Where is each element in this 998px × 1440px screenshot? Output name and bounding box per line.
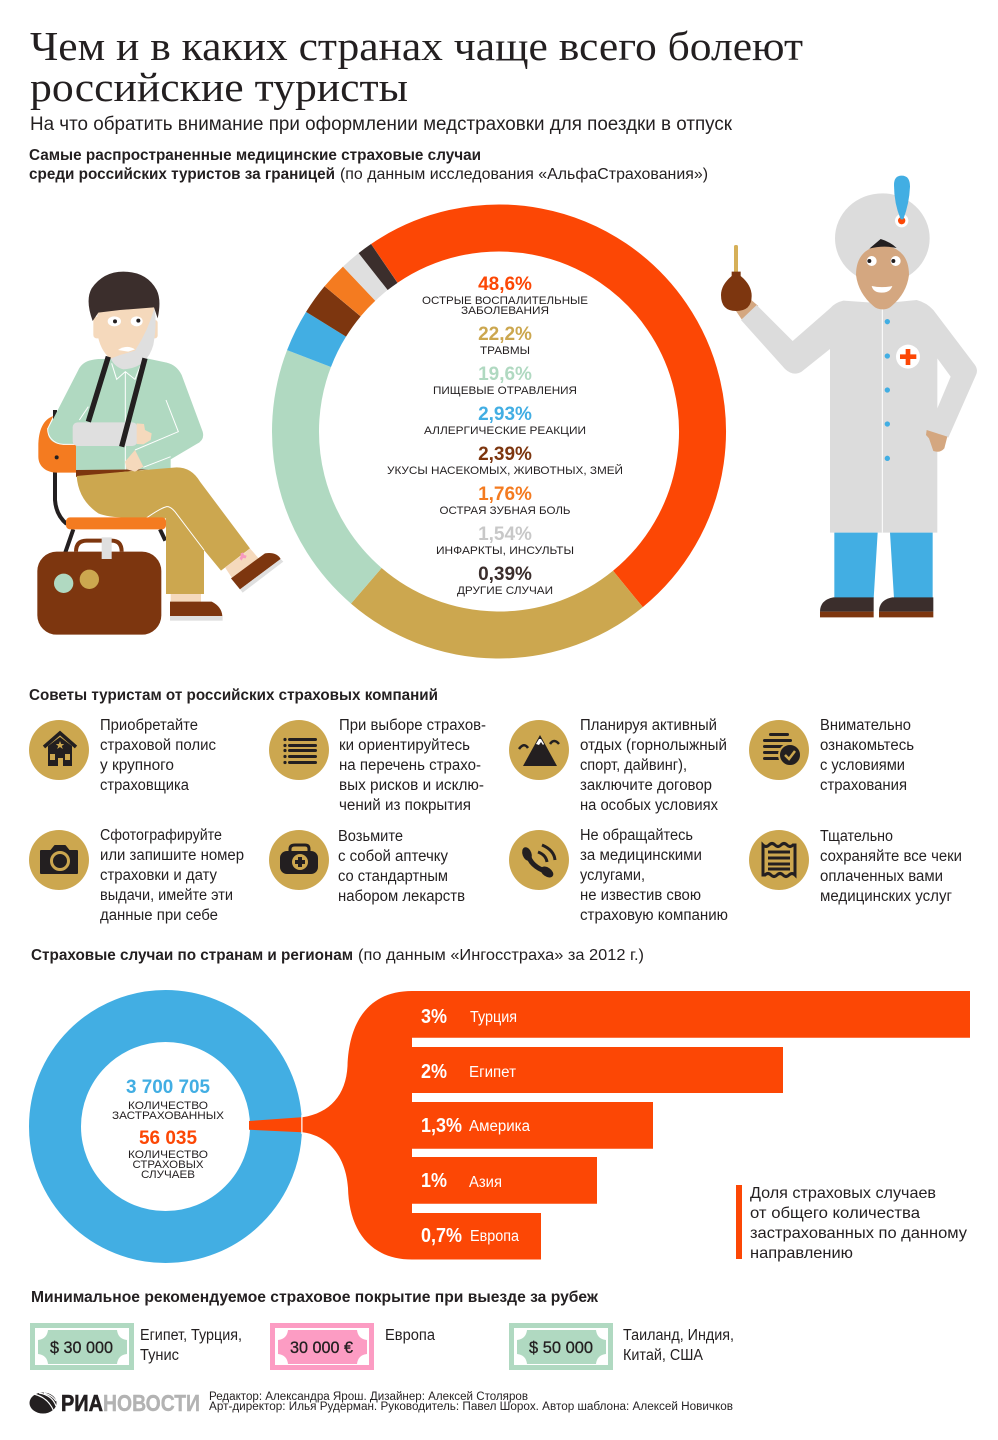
donut centre figures: КОЛИЧЕСТВО (128, 1149, 208, 1161)
donut centre figures (112, 1077, 225, 1181)
credits: Редактор: Александра Ярош. Дизайнер: Алексей Столяров (209, 1391, 528, 1403)
heading: cases by region: (по данным «Ингосстраха» за 2012 г.) (358, 947, 644, 964)
heading: common insurance cases: (по данным исследования «АльфаСтрахования») (340, 166, 708, 183)
donut centre figures: КОЛИЧЕСТВО (128, 1100, 208, 1112)
tip: read risk list: чений из покрытия (339, 797, 471, 814)
banknote: 50000 dollars: $ 50 000 (529, 1339, 593, 1357)
donut legend values: ПИЩЕВЫЕ ОТРАВЛЕНИЯ (433, 385, 577, 397)
logo: RIA Novosti (30, 1390, 200, 1416)
tip: read risk list: ки ориентируйтесь (339, 737, 470, 754)
donut centre figures: 56 035 (139, 1128, 197, 1149)
donut legend values: УКУСЫ НАСЕКОМЫХ, ЖИВОТНЫХ, ЗМЕЙ (387, 464, 623, 477)
tip: buy policy: Приобретайте (100, 717, 198, 734)
donut centre figures: 3 700 705 (126, 1077, 210, 1098)
logo: RIA Novosti: НОВОСТИ (103, 1390, 200, 1416)
legend note: Доля страховых случаев (750, 1185, 936, 1202)
donut legend values: 0,39% (478, 564, 532, 585)
tip: active holiday: Планируя активный (580, 717, 717, 734)
donut legend values: 48,6% (478, 274, 532, 295)
banknote: 50000 dollars: Китай, США (623, 1347, 704, 1364)
donut legend values: 19,6% (478, 364, 532, 385)
bar labels: Америка (469, 1118, 530, 1135)
tip: call insurer: за медицинскими (580, 847, 702, 864)
legend note: направлению (750, 1245, 853, 1262)
bar labels: 1% (421, 1170, 447, 1192)
tip: read conditions: с условиями (820, 757, 905, 774)
legend note (736, 1185, 967, 1262)
tip: first aid kit: набором лекарств (338, 888, 465, 905)
heading: tips: Советы туристам от российских страховых компаний (29, 687, 438, 704)
tip: active holiday (509, 717, 727, 814)
legend note: застрахованных по данному (750, 1225, 967, 1242)
bar labels: Турция (470, 1009, 517, 1026)
bar labels (421, 1006, 530, 1247)
tip: buy policy: страховщика (100, 777, 189, 794)
bar labels: 2% (421, 1061, 447, 1083)
tip: keep receipts (749, 828, 962, 905)
tip: buy policy: у крупного (100, 757, 174, 774)
donut legend values: 2,39% (478, 444, 532, 465)
heading: cases by region: Страховые случаи по странам и регионам (31, 947, 353, 964)
heading: common insurance cases: среди российских туристов за границей (29, 166, 335, 183)
banknote: 30000 euro: 30 000 € (290, 1339, 353, 1357)
tip: keep receipts: сохраняйте все чеки (820, 848, 962, 865)
tip: keep receipts: оплаченных вами (820, 868, 943, 885)
legend note: от общего количества (750, 1205, 920, 1222)
tip: call insurer: страховую компанию (580, 907, 728, 924)
tip: call insurer: Не обращайтесь (580, 827, 693, 844)
tip: read risk list: на перечень страхо- (339, 757, 481, 774)
tip: photograph policy: данные при себе (100, 907, 218, 924)
donut legend values: ЗАБОЛЕВАНИЯ (461, 305, 549, 317)
donut: insured total (55, 1016, 302, 1237)
tip: first aid kit: Возьмите (338, 828, 403, 845)
logo: RIA Novosti: РИА (61, 1390, 103, 1416)
donut chart: insurance cases (211, 144, 787, 719)
banknote: 50000 dollars: Таиланд, Индия, (623, 1327, 734, 1344)
donut legend values: ТРАВМЫ (480, 345, 530, 357)
credits (209, 1391, 733, 1413)
tip: read conditions (749, 717, 914, 794)
bar labels: Азия (469, 1174, 502, 1191)
heading: minimum coverage: Минимальное рекомендуемое страховое покрытие при выезде за рубеж (31, 1289, 599, 1306)
donut legend values: ДРУГИЕ СЛУЧАИ (457, 585, 553, 597)
bar labels: 0,7% (421, 1225, 462, 1247)
tip: call insurer: не известив свою (580, 887, 701, 904)
bar labels: Египет (469, 1064, 516, 1081)
bar labels: 1,3% (421, 1115, 462, 1137)
credits: Арт-директор: Илья Рудерман. Руководитель: Павел Шорох. Автор шаблона: Алексей Новичков (209, 1401, 733, 1413)
donut legend values: 1,54% (478, 524, 532, 545)
tip: first aid kit: с собой аптечку (338, 848, 448, 865)
banknote: 30000 dollars (32, 1326, 242, 1368)
tip: call insurer (509, 827, 728, 924)
banknote: 30000 dollars: $ 30 000 (50, 1339, 113, 1357)
tip: read conditions: страхования (820, 777, 907, 794)
banknote: 30000 dollars: Тунис (140, 1347, 179, 1364)
donut legend values (387, 274, 623, 597)
title (30, 23, 803, 110)
heading: common insurance cases: Самые распространенные медицинские страховые случаи (29, 147, 481, 164)
tip: active holiday: отдых (горнолыжный (580, 737, 727, 754)
donut centre figures: СЛУЧАЕВ (141, 1169, 195, 1181)
tip: read risk list: вых рисков и исклю- (339, 777, 484, 794)
tip: photograph policy: выдачи, имейте эти (100, 887, 233, 904)
donut legend values: ОСТРАЯ ЗУБНАЯ БОЛЬ (440, 505, 570, 517)
banknote: 30000 dollars: Египет, Турция, (140, 1327, 242, 1344)
tip: photograph policy: страховки и дату (100, 867, 217, 884)
donut legend values: ОСТРЫЕ ВОСПАЛИТЕЛЬНЫЕ (422, 295, 588, 307)
banknote: 30000 euro: Европа (385, 1327, 435, 1344)
tip: buy policy (29, 717, 216, 794)
tip: photograph policy: или запишите номер (100, 847, 244, 864)
tip: active holiday: спорт, дайвинг), (580, 757, 687, 774)
subtitle: На что обратить внимание при оформлении медстраховки для поездки в отпуск (30, 114, 733, 135)
title: российские туристы (30, 64, 408, 110)
tip: active holiday: заключите договор (580, 777, 712, 794)
bar labels: Европа (470, 1228, 519, 1245)
donut legend values: ИНФАРКТЫ, ИНСУЛЬТЫ (436, 545, 574, 557)
donut centre figures: СТРАХОВЫХ (132, 1159, 204, 1171)
illustration: injured tourist on chair (37, 272, 283, 635)
tip: read risk list: При выборе страхов- (339, 717, 486, 734)
tip: active holiday: на особых условиях (580, 797, 718, 814)
tip: read risk list (269, 717, 486, 814)
tip: read conditions: ознакомьтесь (820, 737, 914, 754)
tip: photograph policy: Сфотографируйте (100, 827, 222, 844)
tip: keep receipts: медицинских услуг (820, 888, 952, 905)
bar labels: 3% (421, 1006, 447, 1028)
banknote: 50000 dollars (512, 1326, 734, 1368)
donut legend values: 1,76% (478, 484, 532, 505)
heading: common insurance cases (29, 147, 708, 183)
tip: photograph policy (29, 827, 244, 924)
tip: buy policy: страховой полис (100, 737, 216, 754)
heading: cases by region (31, 947, 644, 964)
tip: call insurer: услугами, (580, 867, 645, 884)
tip: keep receipts: Тщательно (820, 828, 893, 845)
donut legend values: 2,93% (478, 404, 532, 425)
funnel connector and bar chart (302, 991, 970, 1260)
tip: first aid kit (269, 828, 465, 905)
donut legend values: 22,2% (478, 324, 532, 345)
title: Чем и в каких странах чаще всего болеют (30, 23, 803, 69)
tip: read conditions: Внимательно (820, 717, 911, 734)
donut centre figures: ЗАСТРАХОВАННЫХ (112, 1110, 225, 1122)
illustration: doctor in turban (721, 176, 977, 617)
tip: first aid kit: со стандартным (338, 868, 448, 885)
donut legend values: АЛЛЕРГИЧЕСКИЕ РЕАКЦИИ (424, 425, 586, 437)
banknote: 30000 euro (272, 1326, 435, 1368)
